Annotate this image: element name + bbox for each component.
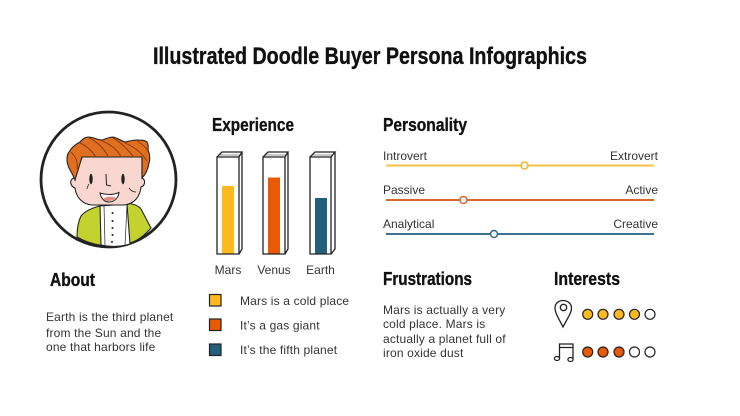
portrait: doodle man in circle (41, 112, 176, 247)
face (71, 157, 145, 205)
legend item: fifth planet: It’s the fifth planet (240, 343, 338, 357)
about text: from the Sun and the (46, 326, 161, 340)
legend item: gas giant: It’s a gas giant (240, 318, 320, 332)
legend (210, 294, 349, 357)
personality heading: Personality (383, 114, 468, 135)
icon: music note (554, 344, 573, 362)
bar labels: Venus (257, 263, 291, 277)
slider: passive to active (383, 183, 658, 204)
legend item: Mars: Mars is a cold place (240, 294, 349, 308)
mouth (100, 192, 119, 202)
slider: introvert to extrovert: Extrovert (610, 149, 659, 163)
bar: Earth (310, 152, 335, 254)
personality sliders (383, 149, 659, 238)
bar chart (215, 152, 335, 277)
frustrations text: cold place. Mars is (383, 317, 485, 331)
jacket (77, 203, 151, 245)
bar labels: Earth (306, 263, 335, 277)
slider: analytical to creative: Analytical (383, 217, 434, 231)
interests heading: Interests (554, 268, 620, 289)
frustrations text: Mars is actually a very (383, 303, 505, 317)
about heading: About (50, 269, 95, 290)
title: Illustrated Doodle Buyer Persona Infographics (153, 43, 587, 70)
slider: introvert to extrovert (383, 149, 659, 169)
bar labels (215, 263, 335, 277)
shirt (100, 204, 130, 246)
interest rating: music (583, 347, 655, 357)
hair (67, 137, 150, 180)
interest rating: places (583, 309, 655, 319)
frustrations text: actually a planet full of (383, 332, 506, 346)
eyes and nose (89, 174, 93, 184)
frustrations heading: Frustrations (383, 268, 472, 289)
bar: Venus (263, 152, 288, 254)
slider: introvert to extrovert: Introvert (383, 149, 428, 163)
bar: Mars (217, 152, 242, 254)
slider: passive to active: Passive (383, 183, 425, 197)
frustrations text: iron oxide dust (383, 346, 464, 360)
slider: passive to active: Active (625, 183, 658, 197)
about text: Earth is the third planet (46, 310, 173, 324)
about text: one that harbors life (46, 340, 156, 354)
experience heading: Experience (212, 114, 294, 135)
slider: analytical to creative (383, 217, 658, 238)
slider: analytical to creative: Creative (613, 217, 658, 231)
bar labels: Mars (215, 263, 241, 277)
icon: map pin (555, 300, 572, 327)
